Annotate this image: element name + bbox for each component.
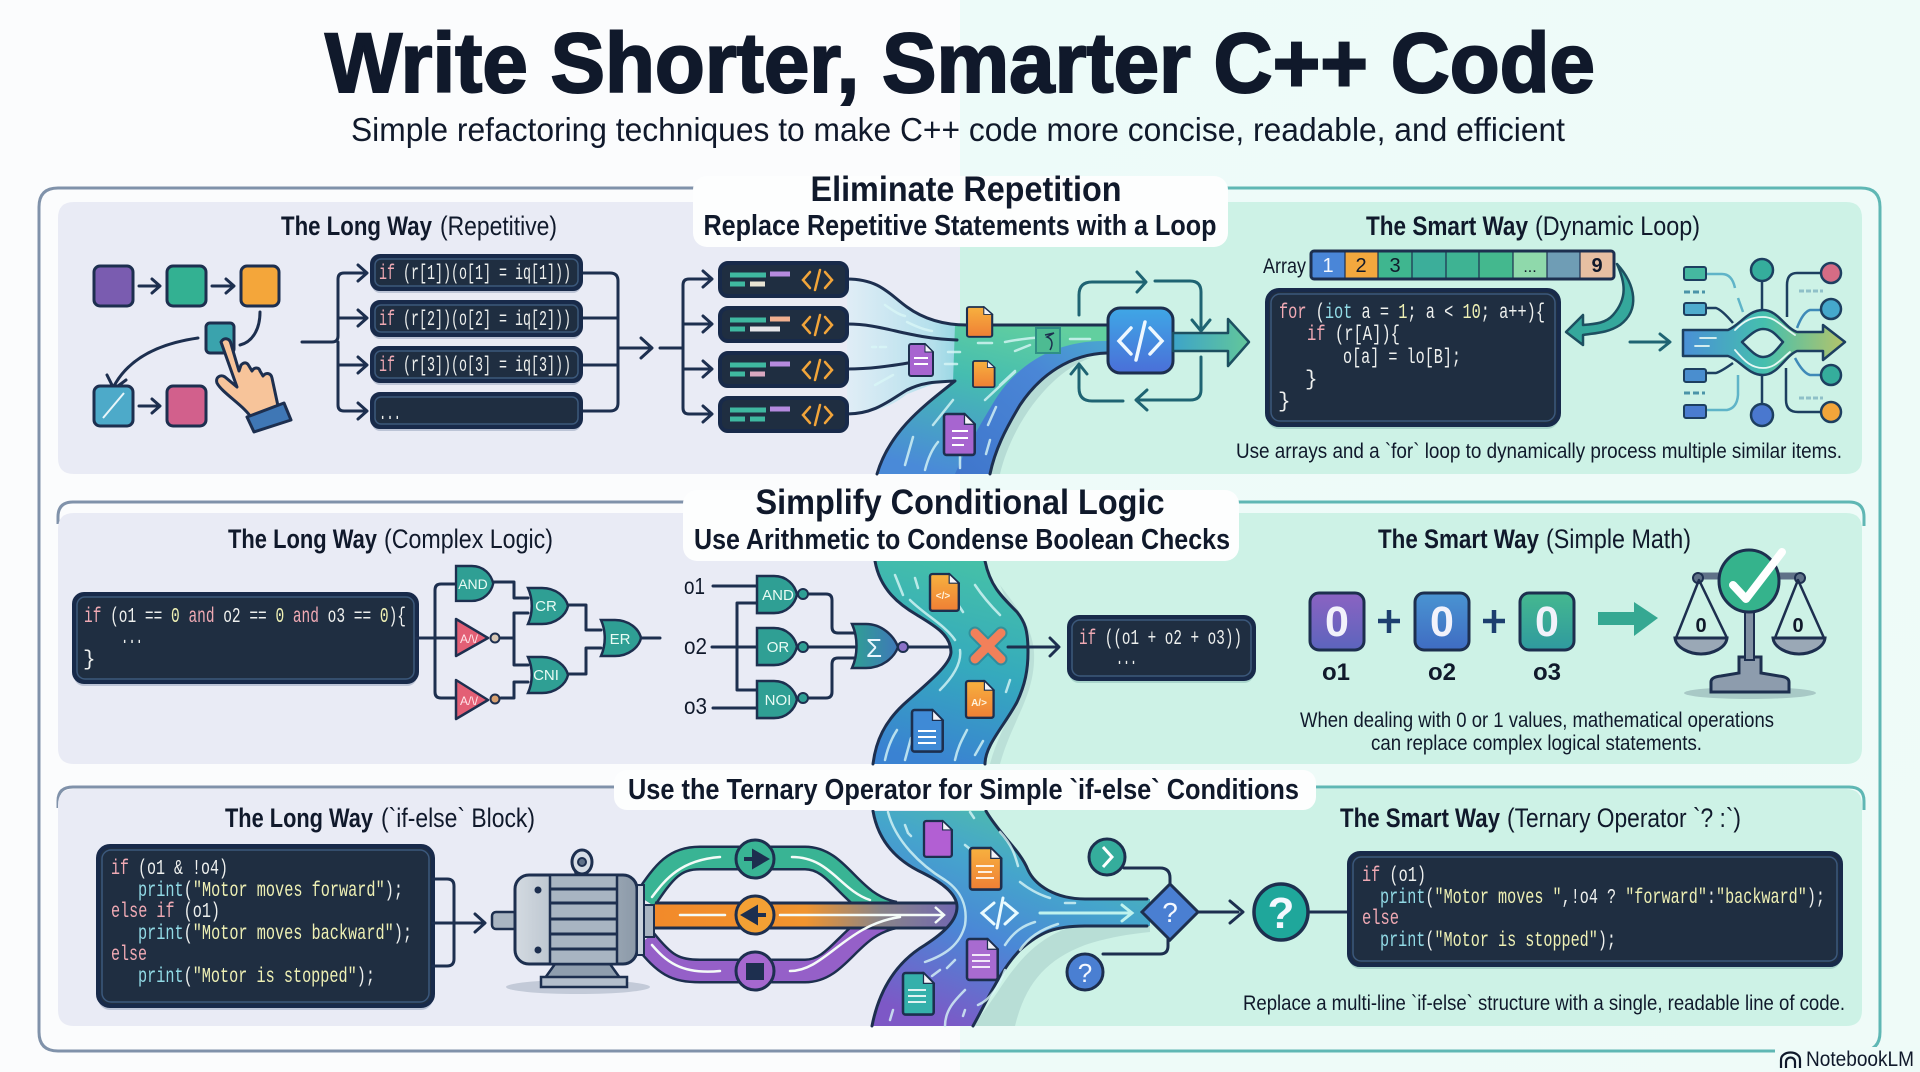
array strip: 3 [1389, 255, 1401, 277]
panel title: long way repetitive [281, 211, 557, 241]
code block: complex if: ... [121, 627, 143, 650]
math tiles: 0 [1325, 598, 1349, 646]
icon: repetitive squares and hand [94, 266, 291, 432]
heading: Ternary Operator: Use the Ternary Operator for Simple `if-else` Conditions [628, 774, 1299, 806]
icon: motor [492, 850, 654, 994]
panel title: long way repetitive: The Long Way [281, 211, 432, 241]
math tiles [1310, 593, 1574, 686]
code block: complex if [74, 594, 417, 686]
code block: if-else: print("Motor moves backward"); [138, 923, 412, 946]
panel title: smart way simple math [1378, 524, 1691, 554]
connector: code fan-out [302, 265, 712, 422]
section 1 panels [58, 202, 1862, 474]
logic diagram: inputs to sum: Σ [866, 633, 882, 663]
river 2 [873, 561, 1034, 764]
logic diagram: inputs to sum: o2 [684, 633, 707, 659]
logic diagram: inputs to sum: o1 [684, 573, 705, 599]
code block: if-else: else [111, 944, 147, 967]
panel title: long way complex logic [228, 524, 553, 554]
river 1 [847, 279, 1107, 474]
section 2 frame line [58, 502, 1864, 526]
array strip: ... [1523, 259, 1537, 276]
code block: ternary: print("Motor moves ",!o4 ? "forward":"backward"); [1380, 887, 1825, 910]
code block: for loop [1267, 290, 1559, 429]
logic diagram: inputs to sum [684, 573, 950, 719]
icon: decision diamond [1067, 839, 1348, 990]
logic diagram: complex gates: CNI [533, 667, 559, 684]
panel title: long way if-else: (`if-else` Block) [381, 803, 535, 833]
panel title: long way repetitive: (Repetitive) [440, 211, 557, 241]
array strip: 1 [1322, 255, 1334, 277]
code chips: small bars [720, 263, 847, 431]
code block: complex if: } [83, 649, 96, 672]
logic diagram: inputs to sum: OR [767, 639, 789, 656]
panel title: long way complex logic: The Long Way [228, 524, 377, 554]
section 3 frame line [58, 787, 1864, 810]
subheading: Use Arithmetic: Use Arithmetic to Condense Boolean Checks [694, 524, 1230, 556]
code bars: repetitive statements: if (r[3])(o[3] = iq[3])) [379, 355, 571, 378]
icon: decision diamond: ? [1268, 889, 1294, 938]
connector: code to motor [433, 879, 485, 966]
panel title: smart way simple math: (Simple Math) [1546, 524, 1691, 554]
code block: ternary: else [1362, 908, 1399, 931]
icons: files and X in river 2 [912, 574, 1001, 752]
icon: code loop button [1071, 272, 1210, 410]
logic diagram: complex gates: A/\/ [460, 632, 479, 646]
output badges on motor paths [736, 840, 774, 990]
array strip [1263, 251, 1614, 279]
icon: balance scale with check: 0 [1695, 615, 1707, 637]
icons: files and X in river 2: </> [936, 591, 950, 602]
logic diagram: complex gates: CR [535, 598, 557, 615]
icons: files in river 3 [903, 821, 1132, 1015]
code block: if-else: else if (o1) [111, 901, 220, 924]
heading: Eliminate Repetition: Eliminate Repetition [810, 170, 1122, 209]
math tiles: o3 [1533, 659, 1561, 686]
outer frame [39, 188, 1880, 1051]
subtitle: Simple refactoring techniques to make C++ code more concise, readable, and efficient [351, 111, 1565, 148]
code block: simplified if: if ((o1 + o2 + o3)) [1079, 628, 1242, 651]
caption: math: When dealing with 0 or 1 values, mathematical operations [1300, 709, 1774, 732]
caption: math: can replace complex logical statements. [1371, 732, 1702, 755]
logic diagram: inputs to sum: o3 [684, 693, 707, 719]
code block: if-else: print("Motor moves forward"); [138, 880, 403, 903]
arrow: to loop code [1173, 319, 1249, 366]
math tiles: o1 [1322, 659, 1350, 686]
code block: for loop: } [1305, 369, 1318, 392]
code bars: repetitive statements [372, 256, 581, 431]
caption: ternary: Replace a multi-line `if-else` structure with a single, readable line of code. [1243, 992, 1845, 1015]
math tiles: o2 [1428, 659, 1456, 686]
code block: if-else [98, 846, 433, 1010]
logic diagram: complex gates: AND [458, 576, 488, 592]
heading box 1 [693, 170, 1228, 247]
logic diagram: inputs to sum: NOI [765, 692, 791, 709]
array strip: 9 [1591, 255, 1603, 277]
array strip: 2 [1355, 255, 1367, 277]
icon: decision diamond: ? [1078, 958, 1092, 988]
array strip: Array [1263, 255, 1306, 278]
heading: Simplify Conditional Logic: Simplify Conditional Logic [756, 483, 1164, 522]
code block: for loop: for (iot a = 1; a < 10; a++){ [1279, 302, 1545, 325]
arrow: array to code [1566, 264, 1633, 345]
panel title: smart way dynamic loop: The Smart Way [1366, 211, 1528, 241]
code block: ternary: print("Motor is stopped"); [1380, 930, 1616, 953]
panel title: smart way ternary: The Smart Way [1340, 803, 1500, 833]
paths: motor outputs [645, 857, 957, 972]
panel title: long way complex logic: (Complex Logic) [384, 524, 553, 554]
logic diagram: complex gates: A/\/ [460, 694, 479, 708]
logic diagram: inputs to sum: AND [762, 587, 794, 604]
heading box 3 [614, 770, 1316, 810]
code block: simplified if [1069, 617, 1254, 683]
panel title: smart way simple math: The Smart Way [1378, 524, 1539, 554]
icon: balance scale with check: 0 [1792, 615, 1804, 637]
icon: decision diamond: ? [1162, 897, 1178, 928]
code block: if-else: if (o1 & !o4) [111, 858, 228, 881]
title: Write Shorter, Smarter C++ Code [325, 16, 1595, 110]
code block: for loop: o[a] = lo[B]; [1343, 347, 1461, 370]
arrow: to simplified code [1008, 638, 1059, 656]
code block: for loop: } [1278, 391, 1291, 414]
panel title: smart way dynamic loop: (Dynamic Loop) [1535, 211, 1700, 241]
code block: for loop: if (r[A]){ [1307, 324, 1400, 347]
icon: balance scale with check [1675, 550, 1825, 699]
logic diagram: complex gates: ER [610, 631, 631, 648]
icons: files and X in river 2: A/> [971, 698, 987, 709]
panel title: smart way ternary: (Ternary Operator `? :`) [1507, 803, 1741, 833]
river 3 [872, 811, 1150, 1026]
code block: ternary [1349, 853, 1841, 969]
code bars: repetitive statements: if (r[2])(o[2] = iq[2])) [379, 309, 571, 332]
arrow: to scale [1598, 602, 1658, 636]
code bars: repetitive statements: if (r[1])(o[1] = iq[1])) [379, 263, 571, 286]
arrow: to network [1630, 334, 1670, 350]
panel title: long way if-else: The Long Way [225, 803, 373, 833]
section 2 panels [58, 513, 1862, 764]
heading box 2 [683, 483, 1239, 561]
panel title: smart way ternary [1340, 803, 1741, 833]
caption: math [1300, 709, 1774, 755]
code bars: repetitive statements: ... [379, 403, 401, 426]
math tiles: 0 [1430, 598, 1454, 646]
math tiles: 0 [1535, 598, 1559, 646]
section 3 panels [58, 789, 1862, 1026]
icon: network flow [1683, 259, 1845, 426]
caption: arrays: Use arrays and a `for` loop to dynamically process multiple similar items. [1236, 440, 1842, 463]
code block: ternary: if (o1) [1362, 865, 1426, 888]
code block: if-else: print("Motor is stopped"); [138, 966, 375, 989]
panel title: smart way dynamic loop [1366, 211, 1700, 241]
icons: file docs in river 1 [909, 307, 1060, 455]
code block: simplified if: ... [1116, 648, 1137, 671]
logic diagram: complex gates [417, 566, 660, 719]
code block: complex if: if (o1 == 0 and o2 == 0 and o3 == 0){ [84, 606, 406, 629]
subheading: Replace Repetitive Statements with a Loop: Replace Repetitive Statements with a Loop [704, 210, 1216, 242]
panel title: long way if-else [225, 803, 535, 833]
